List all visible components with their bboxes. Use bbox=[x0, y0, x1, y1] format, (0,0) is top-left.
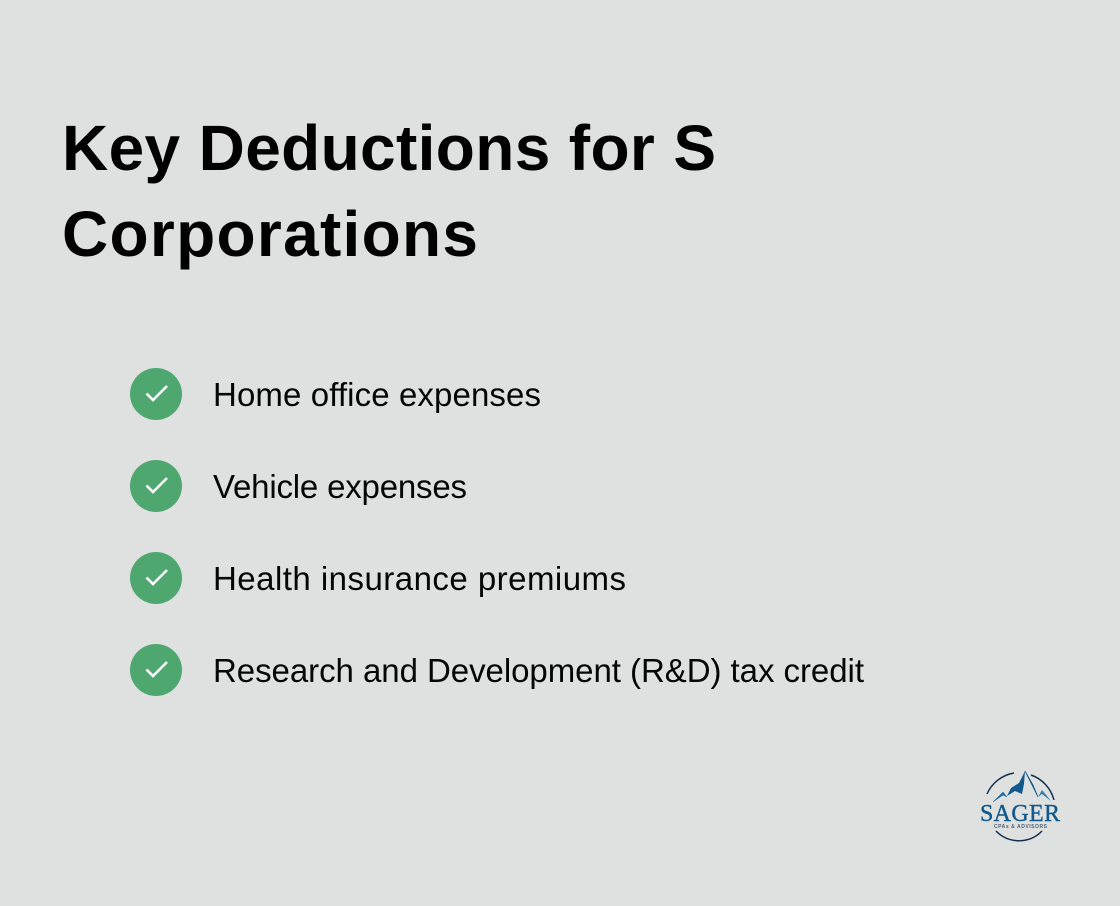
item: vehicle expenses bbox=[130, 460, 467, 512]
icon: mountain bbox=[993, 771, 1051, 802]
item: home office expenses bbox=[130, 368, 541, 420]
item: home office expenses: Home office expenses bbox=[213, 376, 541, 413]
item: research and development tax credit: Research and Development (R&D) tax credit bbox=[213, 652, 864, 689]
checklist bbox=[130, 368, 864, 696]
icon: logo ring bbox=[987, 773, 1054, 841]
item: vehicle expenses: Vehicle expenses bbox=[213, 468, 467, 505]
item: health insurance premiums: Health insurance premiums bbox=[213, 560, 626, 597]
title bbox=[62, 112, 716, 270]
item: health insurance premiums bbox=[130, 552, 626, 604]
logo tagline: CPAs & ADVISORS bbox=[994, 824, 1048, 830]
item: research and development tax credit bbox=[130, 644, 864, 696]
logo wordmark: SAGER bbox=[980, 801, 1060, 827]
title: Corporations bbox=[62, 198, 478, 270]
logo: Sager CPAs & Advisors bbox=[980, 771, 1060, 841]
title: Key Deductions for S bbox=[62, 112, 716, 184]
